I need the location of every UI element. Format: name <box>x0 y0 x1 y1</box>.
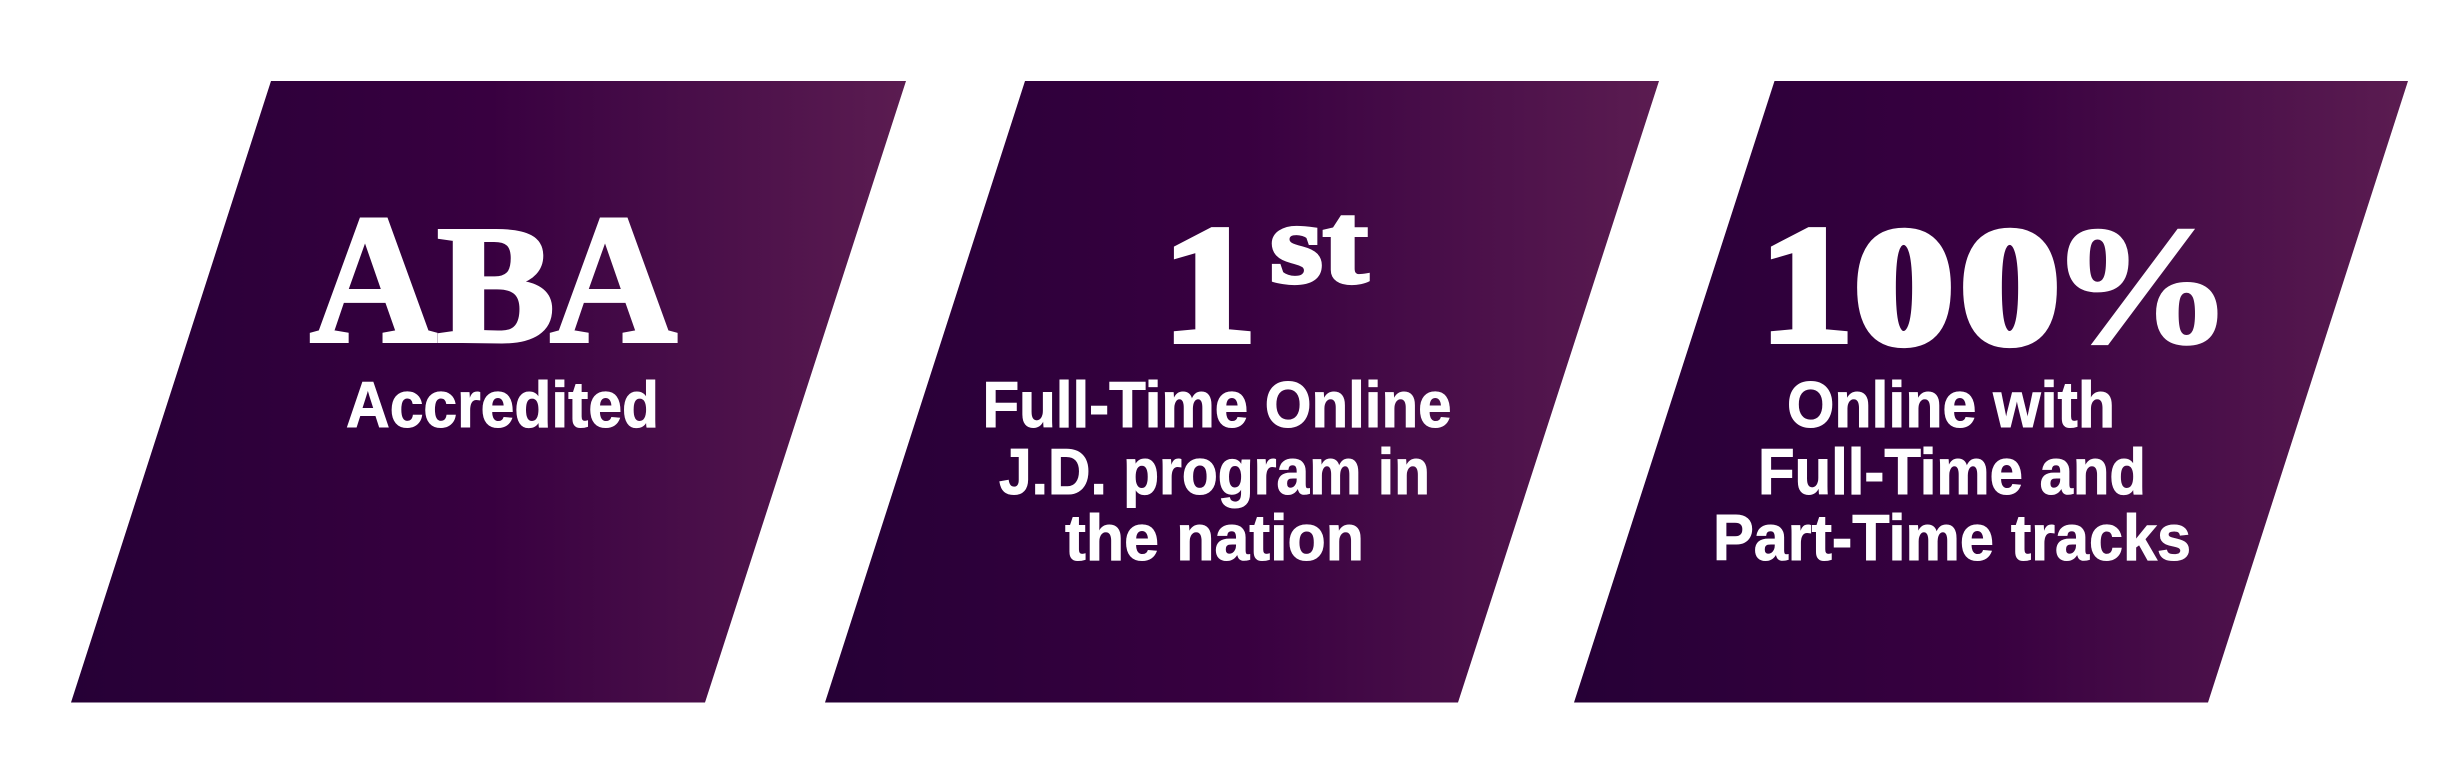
text: Full-Time Online J.D. program in the nation: Full-Time Online <box>982 368 1452 441</box>
text: Online with Full-Time and Part-Time tracks: Online with <box>1787 368 2115 441</box>
text: Accredited: Accredited <box>346 368 659 441</box>
heading: ABA: B <box>437 192 555 378</box>
heading: ABA <box>310 177 677 381</box>
heading: 1st <box>1162 180 1368 378</box>
heading: 1st: 1 <box>1162 192 1257 378</box>
heading: 100%: 0 <box>1961 195 2059 378</box>
text: Online with Full-Time and Part-Time tracks: Full-Time and <box>1758 435 2146 508</box>
heading: ABA: A <box>310 177 437 381</box>
text: Full-Time Online J.D. program in the nation: the nation <box>1065 501 1364 574</box>
heading: 1st: st <box>1270 180 1368 307</box>
heading: 100%: 1 <box>1759 192 1854 378</box>
heading: 100%: 0 <box>1855 195 1953 378</box>
heading: 100% <box>1759 192 2233 379</box>
text: Online with Full-Time and Part-Time tracks: Part-Time tracks <box>1713 501 2191 574</box>
panel: 1st online J.D. <box>825 81 1659 702</box>
text: Online with Full-Time and Part-Time tracks <box>1713 368 2191 574</box>
text: Full-Time Online J.D. program in the nation: J.D. program in <box>999 435 1430 508</box>
panel: 100% online <box>1574 81 2408 702</box>
heading: ABA: A <box>550 177 677 381</box>
panel: ABA accredited <box>71 81 906 702</box>
heading: 100%: % <box>2050 193 2233 379</box>
text: Full-Time Online J.D. program in the nation <box>982 368 1452 574</box>
